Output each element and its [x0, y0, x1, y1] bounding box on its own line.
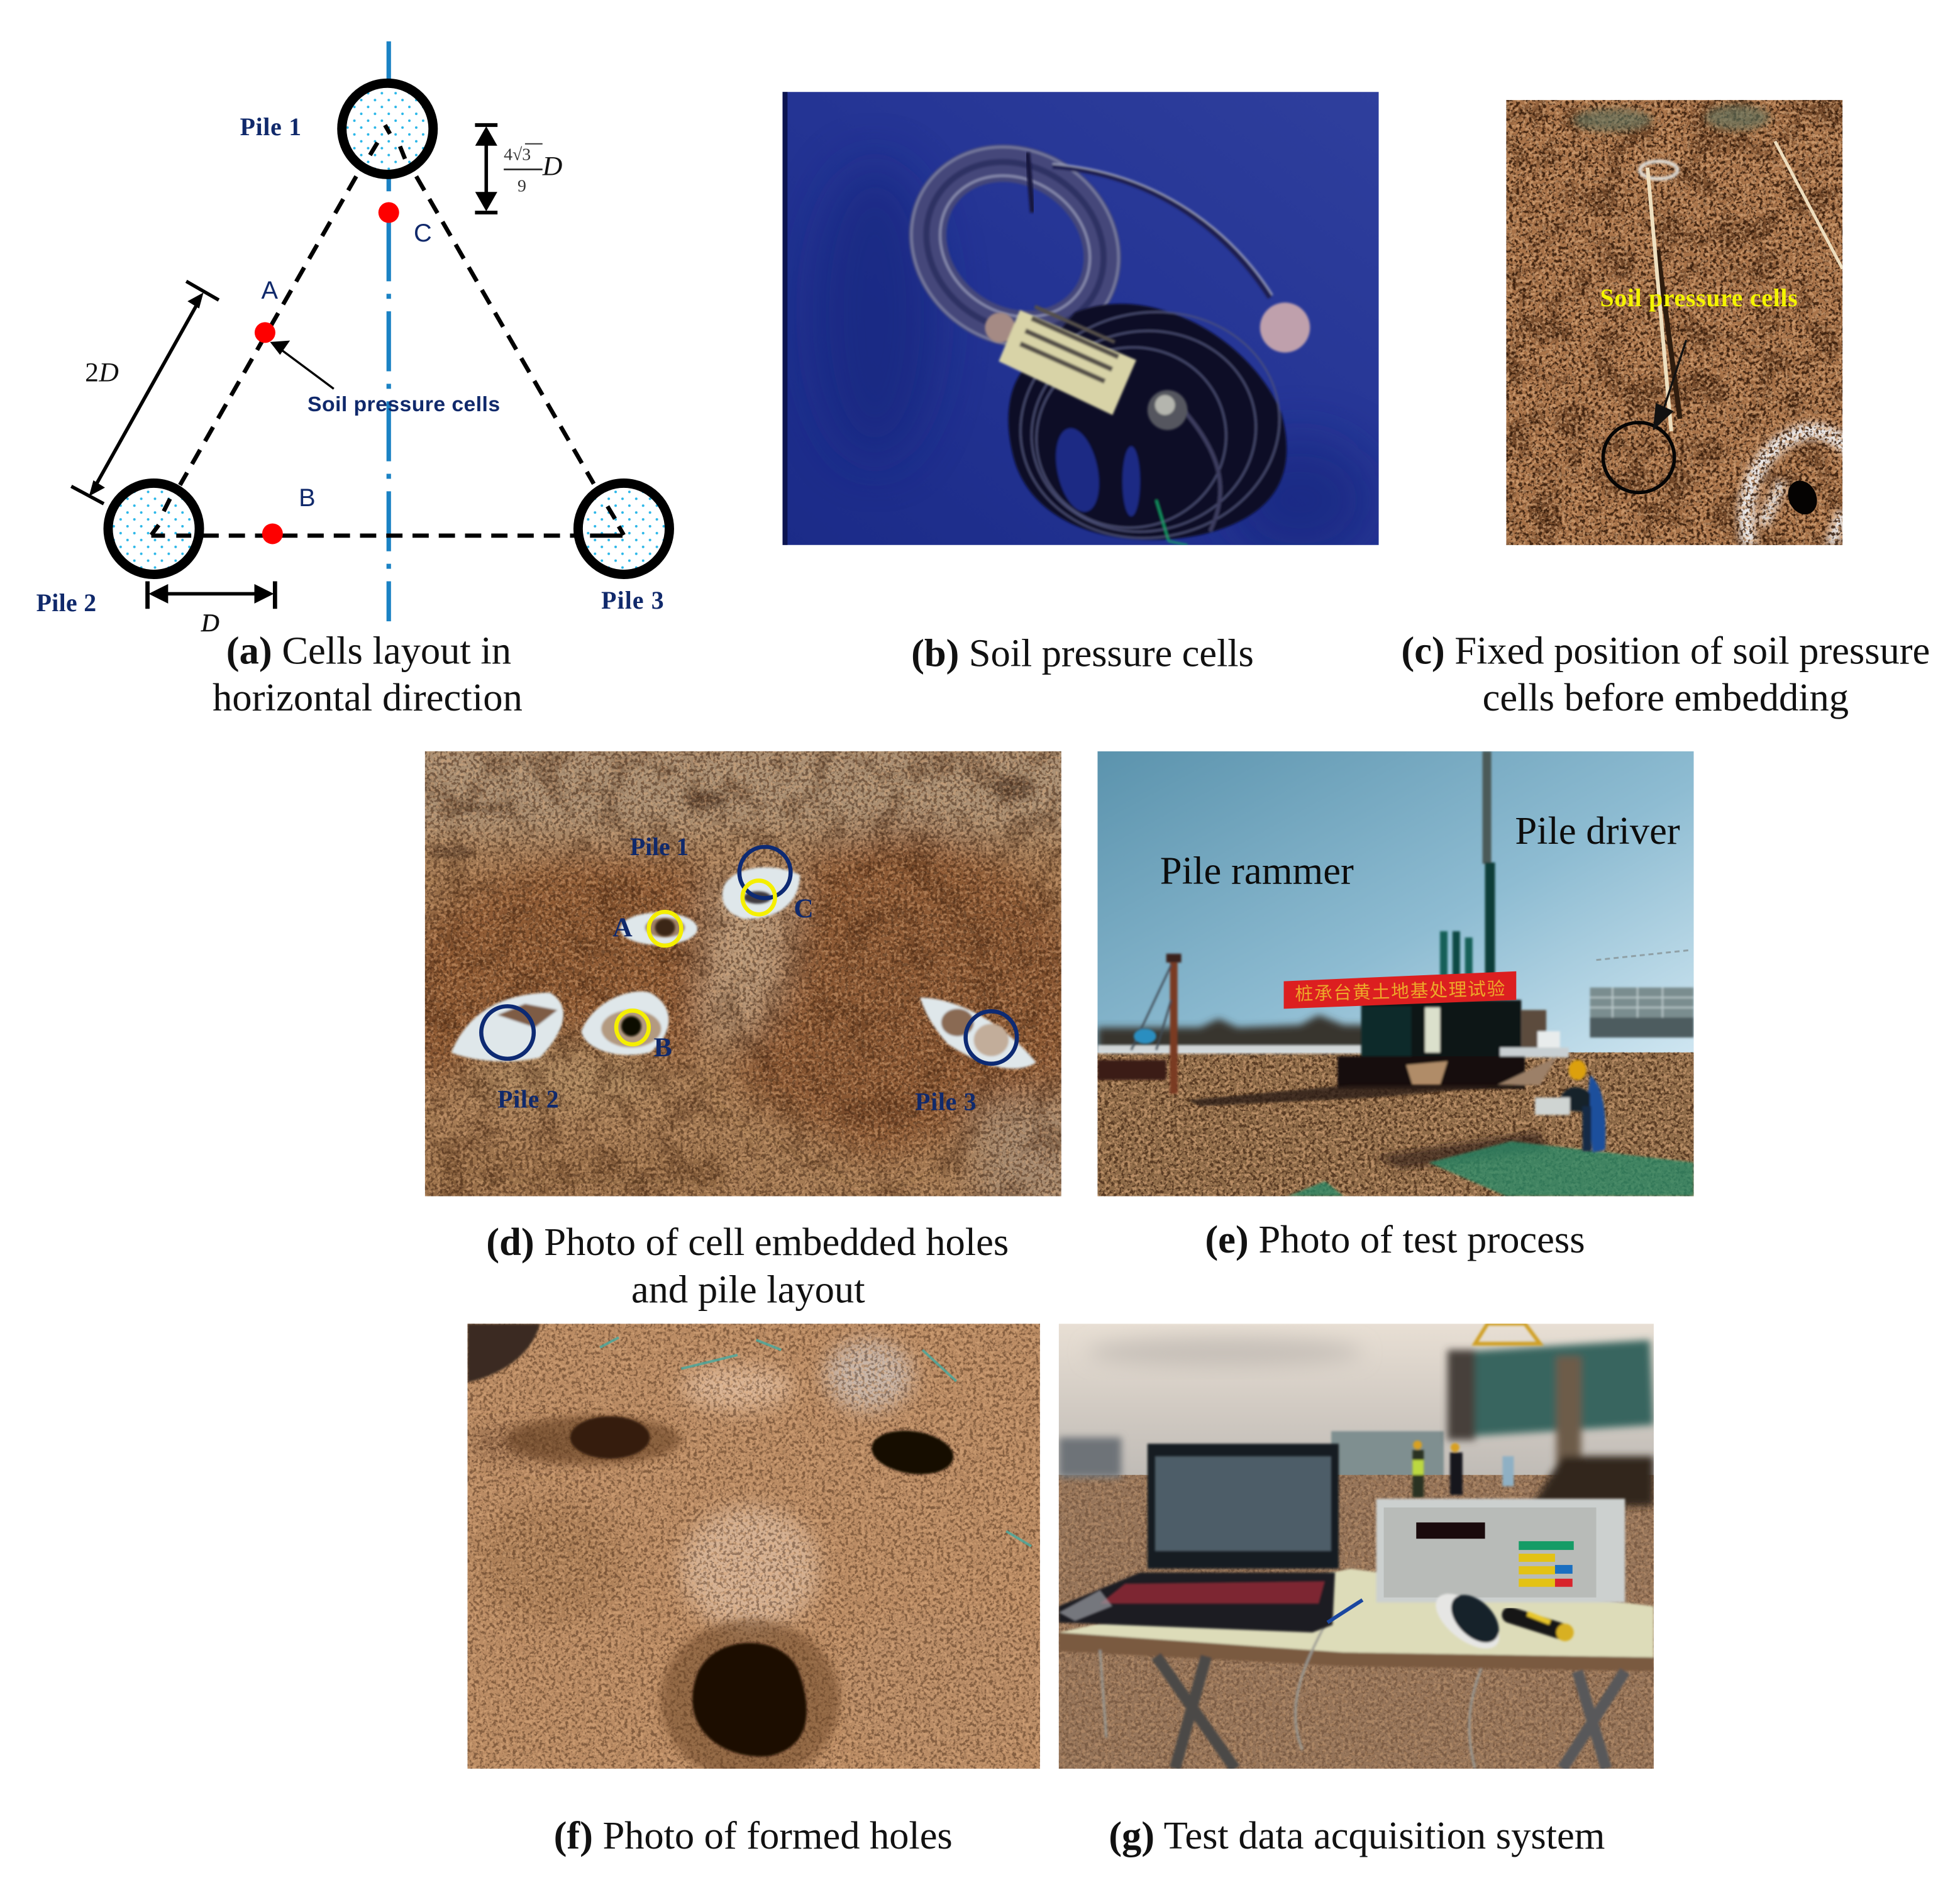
- dark top-left corner: [467, 1324, 540, 1383]
- labels on photo: Pile 2: [497, 1085, 559, 1113]
- sensor lead: [1053, 167, 1270, 297]
- laptop: [1059, 1444, 1339, 1632]
- LED display: [1416, 1522, 1485, 1539]
- label Pile 2: Pile 2: [36, 589, 96, 617]
- caption d: [486, 1220, 1009, 1311]
- label C: C: [414, 219, 432, 247]
- yellow cell circles: [616, 881, 775, 1044]
- worker: [1535, 1060, 1605, 1153]
- white chalk rings: [451, 867, 1036, 1069]
- dimension: 4 root 3 over 9 D: [475, 125, 497, 213]
- lighter soil patches: [468, 1340, 1063, 1762]
- front hole: [660, 1618, 840, 1781]
- label pile rammer: Pile rammer: [1160, 849, 1354, 893]
- banner text: 桩承台黄土地基处理试验: [1295, 979, 1505, 1005]
- pile 3 circle: [578, 483, 670, 575]
- embedding circle: [1603, 423, 1675, 492]
- labels on photo: C: [794, 893, 814, 924]
- teal net scraps: [600, 1337, 1031, 1546]
- yellow buttons: [1519, 1554, 1555, 1587]
- caption a: [213, 629, 523, 719]
- caption c: [1401, 629, 1930, 719]
- far building: [1331, 1431, 1444, 1479]
- steel building: [1590, 988, 1694, 1037]
- grey cable coil: [908, 143, 1274, 346]
- ground: [1097, 1053, 1694, 1197]
- caption a: horizontal direction: [213, 675, 523, 719]
- pen: [1327, 1600, 1363, 1622]
- screwdriver: [1510, 1613, 1574, 1641]
- photo f: formed holes: [467, 1324, 1063, 1781]
- dark streaks: [431, 775, 1035, 858]
- label D: D: [201, 609, 219, 637]
- tree line: [1097, 1015, 1369, 1050]
- dark shadow areas: [828, 179, 1379, 545]
- caption d: (d) Photo of cell embedded holes: [486, 1220, 1009, 1264]
- second ruler: [1775, 141, 1842, 269]
- labels on photo: A: [612, 912, 633, 943]
- pile 2 circle: [108, 483, 199, 575]
- caption g: (g) Test data acquisition system: [1109, 1813, 1605, 1857]
- cable tie: [1027, 153, 1033, 213]
- triangle dashed connections: [180, 176, 594, 536]
- labels on photo: Pile 1: [630, 833, 689, 861]
- white chalk ground ring: [1746, 431, 1850, 545]
- red button: [1555, 1579, 1573, 1587]
- label Pile 1: Pile 1: [240, 113, 301, 141]
- cell point C: [379, 202, 399, 223]
- label A: A: [261, 277, 278, 304]
- pile driver machine: [1337, 751, 1569, 1089]
- caption a: (a) Cells layout in: [226, 629, 511, 673]
- transducer body: [985, 305, 1187, 430]
- caption f: (f) Photo of formed holes: [554, 1813, 953, 1857]
- dimension: D: [148, 581, 275, 609]
- hole: [1783, 476, 1822, 519]
- photo c: fixed position of soil pressure cells: [1506, 100, 1850, 545]
- white marker ring: [1640, 162, 1678, 179]
- cell point A: [255, 322, 275, 343]
- red banner: [1284, 971, 1516, 1009]
- right hole: [868, 1425, 956, 1479]
- vegetation strip: [1573, 105, 1770, 131]
- caption b: (b) Soil pressure cells: [911, 631, 1254, 675]
- label soil pressure cells: Soil pressure cells: [307, 392, 500, 416]
- blue button: [1555, 1565, 1573, 1574]
- black cable coil: [1007, 302, 1288, 545]
- excavator lifting frame: [1475, 1324, 1540, 1344]
- centre line: [387, 41, 390, 621]
- photo e: test process site: [1097, 751, 1694, 1197]
- green safety net: [1288, 1141, 1694, 1197]
- dimension: 2D: [71, 281, 219, 504]
- caption d: and pile layout: [631, 1267, 865, 1311]
- arrow to soil pressure cell: [271, 341, 334, 389]
- instrument box: [1376, 1499, 1625, 1603]
- distant crane line: [1597, 950, 1691, 960]
- label 2D: 2D: [85, 357, 119, 387]
- caption e: (e) Photo of test process: [1205, 1217, 1585, 1261]
- pressure sensor disc: [1260, 302, 1310, 353]
- cell point B: [262, 523, 283, 544]
- table: [1059, 1569, 1654, 1769]
- ruler: [1658, 250, 1680, 419]
- photo d: cell embedded holes and pile layout: [387, 725, 1100, 1212]
- low buildings at left: [1059, 1437, 1121, 1478]
- fraction label: 9: [518, 176, 526, 196]
- holes: [621, 891, 772, 1036]
- caption c: (c) Fixed position of soil pressure: [1401, 629, 1930, 673]
- shadow on ground: [1187, 1085, 1519, 1106]
- green buttons: [1519, 1541, 1574, 1550]
- fraction label: 4√3: [504, 145, 531, 165]
- pile 1 circle: [342, 83, 433, 174]
- photo b: soil pressure cells on blue background: [782, 91, 1379, 563]
- pile rammer: [1097, 954, 1182, 1094]
- caption c: cells before embedding: [1483, 675, 1849, 719]
- ground tone regions: [387, 725, 1100, 1212]
- label: soil pressure cells: Soil pressure cells: [1600, 284, 1798, 312]
- photo g: test data acquisition system: [1059, 1324, 1654, 1769]
- labels on photo: B: [654, 1032, 672, 1063]
- excavator: [1448, 1340, 1654, 1507]
- white fence: [1097, 1045, 1366, 1054]
- lead tail: [1182, 407, 1221, 531]
- label pile driver: Pile driver: [1515, 809, 1680, 853]
- mouse: [1426, 1583, 1509, 1659]
- fraction label: [504, 144, 562, 196]
- panel a: cells layout diagram: [36, 41, 670, 637]
- label B: B: [299, 484, 316, 512]
- darker cloud band: [1087, 1337, 1363, 1368]
- navy pile circles: [481, 847, 1017, 1064]
- label Pile 3: Pile 3: [601, 587, 664, 614]
- labels on photo: Pile 3: [915, 1088, 977, 1115]
- workers: [1412, 1440, 1514, 1498]
- inner gap of coil: [1049, 424, 1106, 516]
- ground: [1059, 1475, 1654, 1769]
- left hole: [506, 1415, 681, 1465]
- labels on photo: [497, 833, 977, 1115]
- fraction label: D: [542, 151, 562, 181]
- arrow: [1654, 340, 1686, 429]
